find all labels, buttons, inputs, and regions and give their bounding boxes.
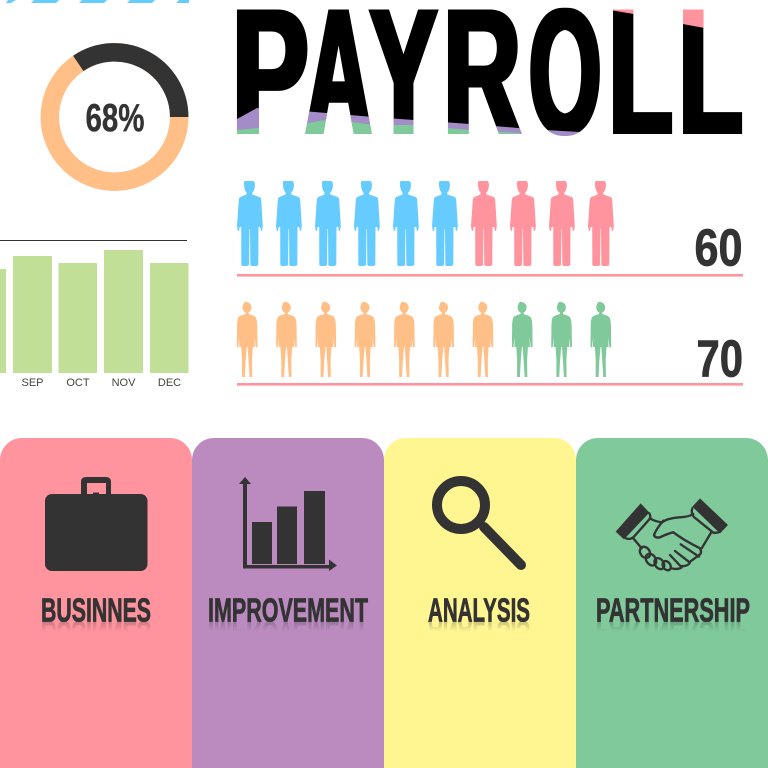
bar chart: NOV: [112, 377, 136, 389]
panel: partnership: [576, 438, 768, 768]
icon: handshake: [616, 498, 728, 572]
icon: briefcase: [45, 477, 148, 571]
panel: improvement: [192, 438, 384, 768]
male pictogram row: 60: [237, 181, 743, 278]
bar chart: OCT: [66, 377, 90, 389]
male pictogram row: 60: 60: [694, 220, 742, 278]
donut chart 68%: [50, 52, 179, 182]
bar chart: [0, 240, 188, 389]
panel: business: [0, 438, 192, 768]
panel: analysis: [384, 438, 576, 768]
icon: rising bar chart: [239, 477, 337, 571]
title: PAYROLL: [232, 0, 743, 172]
donut chart 68%: 68%: [86, 97, 144, 140]
bar chart: SEP: [21, 377, 44, 389]
icon: magnifying glass: [432, 476, 526, 570]
female pictogram row: 70: [237, 302, 743, 388]
top area graphics: [0, 0, 743, 389]
bar chart: DEC: [158, 377, 181, 389]
female pictogram row: 70: 70: [696, 330, 743, 388]
top dashes: [6, 0, 189, 3]
